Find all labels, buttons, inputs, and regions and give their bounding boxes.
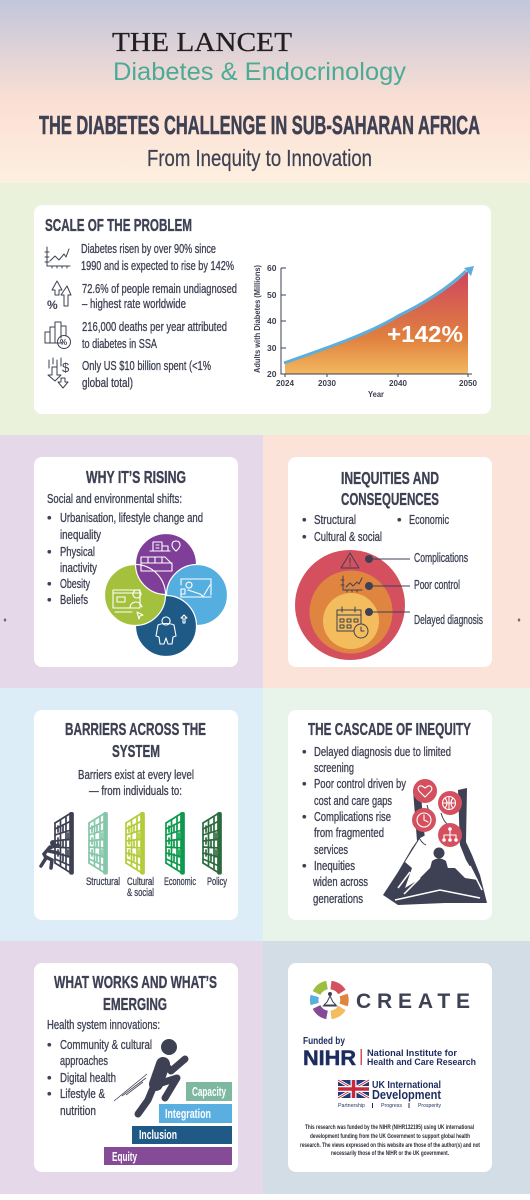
list: health system innovations: nutrition	[60, 1103, 96, 1118]
logo: UK International Development: Prosperity	[418, 1103, 442, 1109]
text: funding disclaimer	[300, 1124, 481, 1157]
icon: bars with percent	[45, 322, 70, 348]
text: social and environmental shifts: inequality	[60, 527, 101, 542]
list: cascade steps: •	[302, 744, 307, 759]
icon: city and bus	[141, 541, 180, 571]
heading: barriers	[65, 719, 206, 761]
icon: person on sofa	[181, 579, 211, 597]
label: policy: Policy	[207, 876, 227, 888]
heading: barriers: BARRIERS ACROSS THE	[65, 719, 206, 739]
text: social and environmental shifts	[47, 491, 203, 607]
step: inclusion: Inclusion	[139, 1127, 177, 1142]
list: cascade steps: •	[302, 858, 307, 873]
icon: person pushing wall	[41, 813, 73, 874]
heading: why it's rising: WHY IT’S RISING	[86, 467, 186, 487]
icon: online consultation	[113, 590, 143, 619]
list: cascade steps: services	[314, 842, 348, 857]
step: equity: Equity	[112, 1149, 137, 1164]
icon: cultural wall	[126, 813, 144, 874]
panel: funders and partners	[288, 963, 492, 1172]
list: inequity types: •	[302, 512, 307, 527]
text: social and environmental shifts: •	[47, 544, 52, 559]
list: cascade steps: Complications rise	[314, 809, 391, 824]
list: health system innovations: Community & cultural	[60, 1037, 152, 1052]
list: inequity types: Economic	[409, 512, 449, 527]
label: complications: Complications	[414, 550, 468, 565]
area chart: adults with diabetes	[253, 263, 477, 399]
list: inequity types: Cultural & social	[314, 529, 382, 544]
logo: CREATE	[314, 985, 470, 1015]
callout: +142%: +142%	[387, 321, 463, 347]
logo: UK International Development	[338, 1079, 442, 1109]
icon: red heart circle	[413, 779, 437, 803]
list: health system innovations: •	[47, 1037, 52, 1052]
icon: economic wall	[166, 813, 184, 874]
list: cascade steps: widen across	[312, 874, 368, 889]
list: inequity types: Structural	[314, 512, 356, 527]
list: health system innovations: •	[47, 1086, 52, 1101]
list: health system innovations	[47, 1017, 160, 1118]
label: cultural and social: & social	[127, 887, 154, 899]
text: social and environmental shifts: Beliefs	[60, 592, 88, 607]
text: barriers intro: Barriers exist at every level	[78, 767, 194, 782]
diagram: nested circles	[295, 550, 410, 660]
label: cultural and social	[127, 876, 154, 899]
stat: spending: global total)	[82, 375, 133, 390]
step: inclusion	[132, 1126, 232, 1144]
step: equity	[104, 1147, 232, 1165]
list: cascade steps: •	[302, 809, 307, 824]
heading: inequities and consequences: INEQUITIES AND	[341, 468, 439, 488]
logo: CREATE: CREATE	[356, 990, 470, 1013]
logo: UK International Development: Partnership	[338, 1103, 365, 1109]
icon: warning triangle	[341, 553, 359, 568]
logo: NIHR: NIHR	[303, 1047, 356, 1070]
list: cascade steps: screening	[314, 760, 354, 775]
step: capacity: Capacity	[192, 1084, 226, 1099]
text: social and environmental shifts: Urbanisation, lifestyle change and	[60, 510, 203, 525]
icon: policy wall	[203, 813, 221, 874]
icon: red clock circle	[412, 808, 436, 832]
logo: UK International Development: UK International	[372, 1079, 441, 1091]
label: economic: Economic	[164, 876, 196, 888]
stat: spending: Only US $10 billion spent (<1%	[82, 358, 211, 373]
journal logo: THE LANCET	[112, 27, 293, 57]
step: integration: Integration	[165, 1106, 211, 1121]
panel: barriers across the system	[34, 710, 238, 920]
heading: barriers: SYSTEM	[112, 741, 160, 761]
journal logo: Diabetes & Endocrinology	[113, 58, 407, 86]
panel: what works and what's emerging	[34, 963, 238, 1172]
icon: dollar arrows down	[48, 358, 70, 388]
logo: NIHR	[303, 1035, 476, 1070]
logo: NIHR: Health and Care Research	[367, 1057, 476, 1067]
area chart: adults with diabetes: 2040	[389, 378, 407, 388]
logo: UK International Development: Progress	[381, 1103, 403, 1109]
list: cascade steps: generations	[313, 891, 363, 906]
text: social and environmental shifts: Social and environmental shifts:	[47, 491, 182, 506]
step: capacity	[186, 1082, 232, 1101]
list: inequity types: •	[397, 512, 402, 527]
area chart: adults with diabetes: Year	[368, 389, 385, 399]
subtitle: From Inequity to Innovation	[147, 145, 372, 171]
journal logo	[112, 27, 407, 86]
list: cascade steps: Poor control driven by	[314, 776, 406, 791]
heading: what works: WHAT WORKS AND WHAT’S	[54, 972, 217, 992]
stat: undiagnosed	[82, 281, 237, 311]
area chart: adults with diabetes: 20	[267, 369, 277, 379]
list: health system innovations: •	[47, 1070, 52, 1085]
text: social and environmental shifts: •	[47, 592, 52, 607]
icon: runner climbing steps	[114, 1039, 185, 1114]
area chart: adults with diabetes: 2024	[276, 378, 294, 388]
area chart: adults with diabetes: 2030	[318, 378, 336, 388]
label: delayed diagnosis: Delayed diagnosis	[414, 612, 483, 627]
list: cascade steps: Delayed diagnosis due to limited	[314, 744, 451, 759]
stat: undiagnosed: 72.6% of people remain undiagnosed	[82, 281, 237, 296]
stat: undiagnosed: – highest rate worldwide	[82, 296, 186, 311]
text: social and environmental shifts: inactivity	[60, 560, 97, 575]
text: social and environmental shifts: •	[47, 576, 52, 591]
list: cascade steps	[302, 744, 451, 906]
illustration: person meditating under waterfall	[383, 779, 487, 905]
area chart: adults with diabetes: 50	[267, 290, 277, 300]
list: cascade steps: •	[302, 776, 307, 791]
icon: chart	[341, 576, 362, 592]
icon: red network circle	[438, 823, 462, 847]
list: cascade steps: from fragmented	[314, 825, 384, 840]
stat: diabetes rise	[81, 241, 234, 273]
list: inequity types: •	[302, 529, 307, 544]
icon: structural wall	[89, 813, 107, 874]
icon: percent arrows up	[47, 281, 71, 312]
list: cascade steps: Inequities	[314, 858, 355, 873]
area chart: adults with diabetes: Adults with Diabetes (Millions)	[253, 265, 262, 373]
area chart: adults with diabetes: 2050	[459, 378, 477, 388]
heading: inequities and consequences	[341, 468, 439, 509]
text: social and environmental shifts: •	[47, 510, 52, 525]
label: structural: Structural	[86, 876, 120, 888]
stat: spending	[82, 358, 211, 390]
stat: diabetes rise: 1990 and is expected to rise by 142%	[81, 258, 234, 273]
text: social and environmental shifts: Obesity	[60, 576, 90, 591]
panel: cascade of inequity	[288, 710, 492, 920]
icon: line chart	[45, 247, 70, 268]
heading: what works: EMERGING	[103, 994, 167, 1014]
list: health system innovations: Digital health	[60, 1070, 116, 1085]
label: poor control: Poor control	[414, 577, 460, 592]
list: health system innovations: Health system innovations:	[47, 1017, 160, 1032]
icon: calendar and clock	[337, 607, 368, 638]
logo: NIHR: Funded by	[303, 1035, 345, 1047]
area chart: adults with diabetes: 60	[267, 263, 277, 273]
panel: why it's rising	[34, 457, 238, 667]
icon: bars with percent: %	[60, 338, 67, 347]
stat: deaths: 216,000 deaths per year attributed	[82, 319, 227, 334]
logo: NIHR: National Institute for	[367, 1048, 458, 1058]
text: funding disclaimer: development funding from the UK Government to support global health	[310, 1133, 470, 1140]
panel: scale of the problem	[34, 205, 491, 414]
logo: UK International Development: Development	[372, 1088, 442, 1102]
heading: scale of the problem: SCALE OF THE PROBLEM	[45, 215, 192, 235]
list: health system innovations: Lifestyle &	[60, 1086, 105, 1101]
list: cascade steps: cost and care gaps	[314, 793, 392, 808]
area chart: adults with diabetes: 30	[267, 343, 277, 353]
text: funding disclaimer: necessarily those of the NIHR or the UK government.	[331, 1150, 449, 1157]
stat: diabetes rise: Diabetes risen by over 90% since	[81, 241, 216, 256]
stat: deaths: to diabetes in SSA	[82, 336, 157, 351]
text: barriers intro: — from individuals to:	[89, 783, 182, 798]
icon: dollar arrows down: $	[62, 360, 70, 375]
heading: what works	[54, 972, 217, 1014]
list: health system innovations: approaches	[60, 1053, 108, 1068]
icon: percent arrows up: %	[47, 298, 58, 312]
label: cultural and social: Cultural	[127, 876, 154, 888]
heading: inequities and consequences: CONSEQUENCES	[341, 489, 439, 509]
diagram: four overlapping circles	[104, 534, 228, 656]
panel: inequities and consequences	[288, 457, 492, 667]
list: inequity types	[302, 512, 449, 544]
stat: deaths	[82, 319, 227, 351]
text: social and environmental shifts: Physical	[60, 544, 95, 559]
area chart: adults with diabetes: 40	[267, 316, 277, 326]
icon: person with weight gain	[156, 615, 187, 644]
text: barriers intro	[78, 767, 194, 798]
icon: red globe circle	[438, 791, 462, 815]
